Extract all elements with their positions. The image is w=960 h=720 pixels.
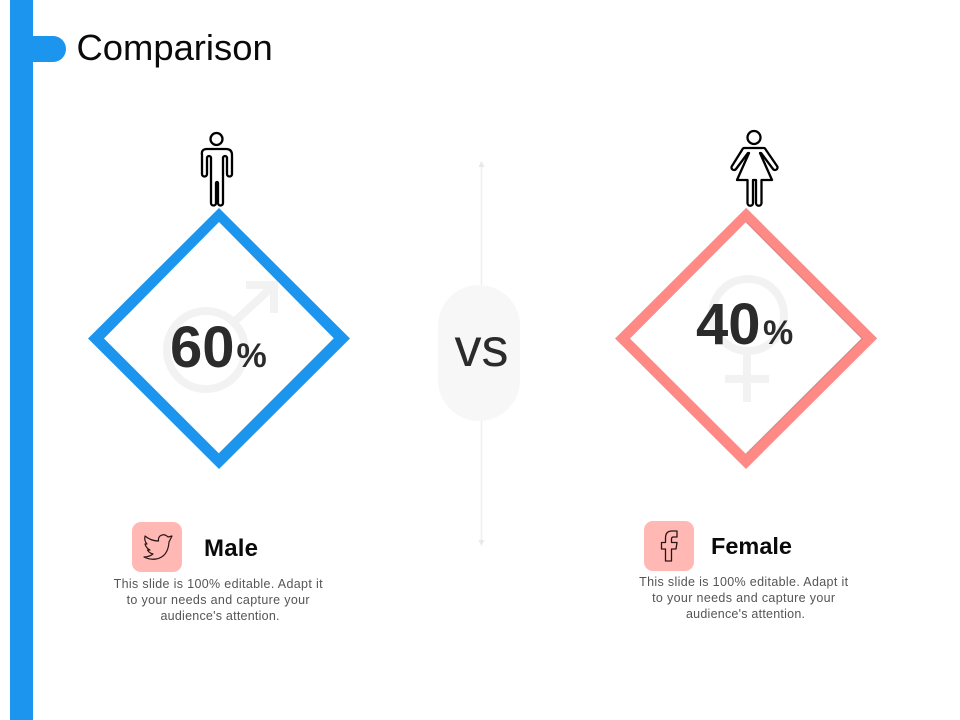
text block: male description: This slide is 100% editable. Adapt it [114, 577, 323, 591]
pill [438, 285, 520, 421]
icon: twitter tile [132, 522, 182, 572]
icon: female figure [732, 131, 778, 206]
panel: female [615, 131, 877, 621]
title: Comparison [76, 27, 273, 68]
heading: male: Male [204, 535, 258, 562]
left sidebar with title tab [10, 0, 66, 720]
heading: female: Female [711, 533, 792, 559]
text block: female description: audience's attention. [686, 607, 805, 621]
text block: male description: audience's attention. [160, 609, 280, 623]
vs label: vs [454, 318, 508, 378]
text block: female description: This slide is 100% editable. Adapt it [639, 575, 849, 589]
panel: versus divider [438, 161, 520, 546]
stat: 60%: 60% [170, 315, 267, 380]
arrow: up [478, 161, 484, 285]
arrow: down [478, 421, 484, 546]
text block: female description: to your needs and capture your [652, 591, 835, 605]
stat: 40%: 40% [696, 292, 793, 357]
text block: male description: to your needs and capture your [127, 593, 310, 607]
icon: facebook tile [644, 521, 694, 571]
panel: male [88, 133, 350, 623]
icon: male figure [202, 133, 232, 206]
icon: female symbol watermark [712, 279, 784, 402]
icon: male symbol watermark [167, 285, 274, 389]
diamond: male [88, 208, 350, 469]
diamond: female [615, 208, 877, 469]
